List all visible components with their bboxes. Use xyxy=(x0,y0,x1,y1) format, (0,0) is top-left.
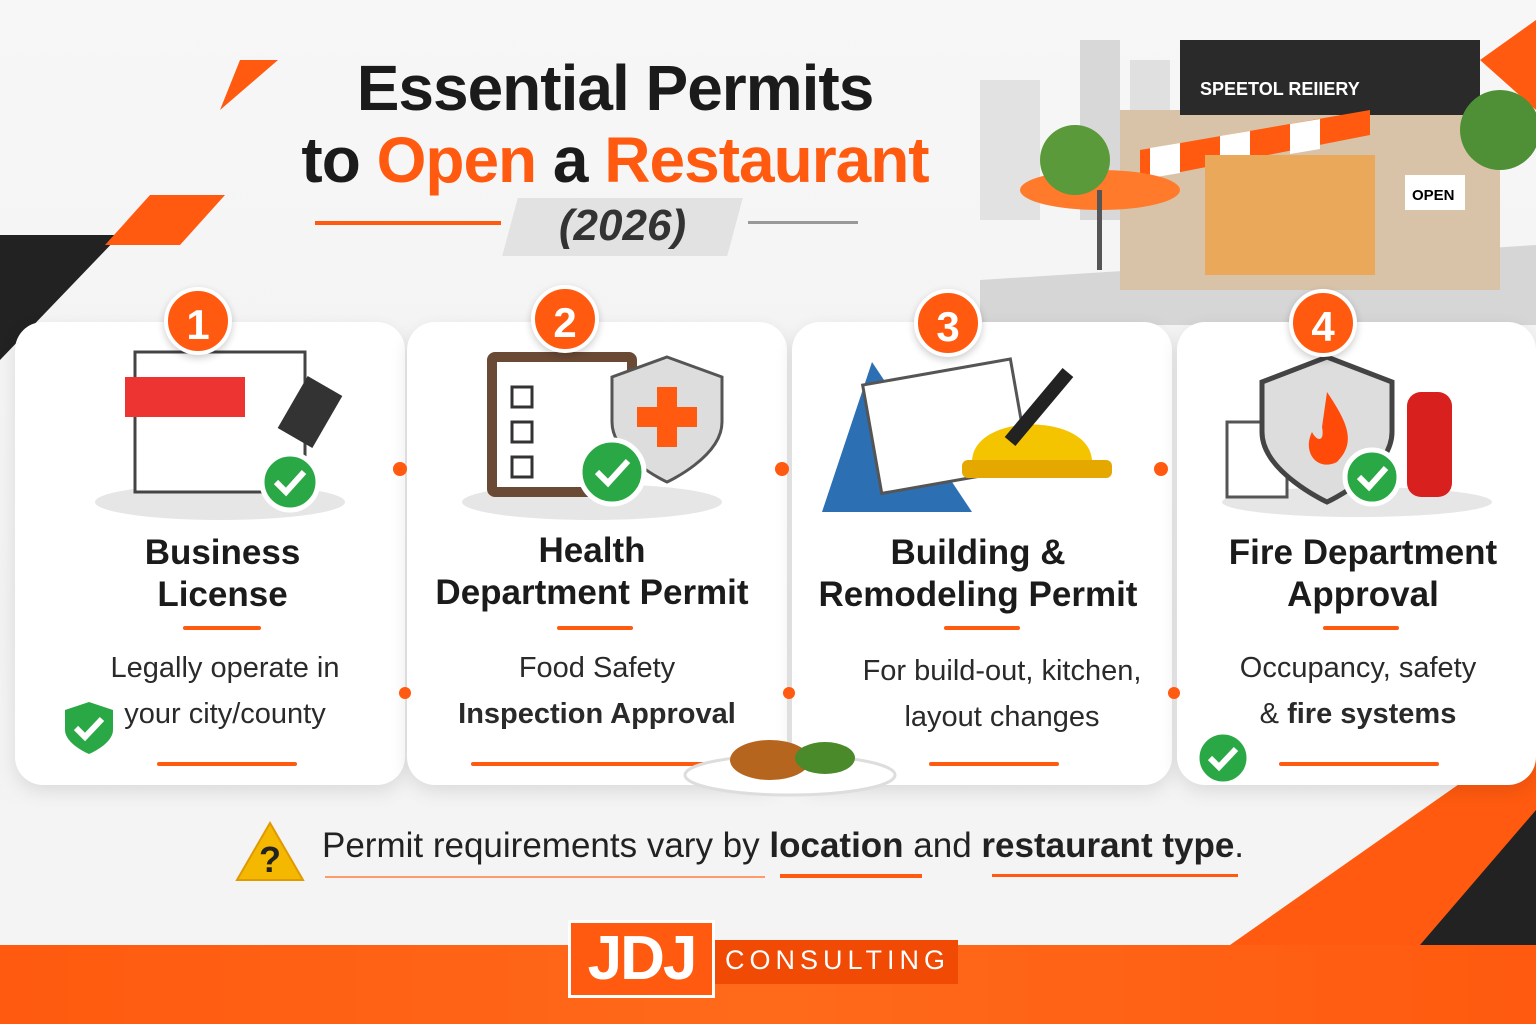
heading: Department Permit xyxy=(435,573,749,612)
icon: warning: ? xyxy=(259,839,281,880)
heading: Approval xyxy=(1287,575,1439,614)
heading xyxy=(1229,533,1497,614)
logo: JDJ consulting: CONSULTING xyxy=(725,945,950,975)
number 2: 2 xyxy=(553,299,577,346)
heading: Building & xyxy=(891,533,1065,572)
icon: check xyxy=(65,702,113,754)
callout: warning note xyxy=(235,821,1244,881)
text xyxy=(458,652,736,730)
title: Essential Permits xyxy=(357,52,873,124)
logo: JDJ consulting xyxy=(568,920,958,998)
heading xyxy=(435,531,749,612)
panel: fire department xyxy=(1177,322,1536,785)
panel: building xyxy=(792,322,1172,785)
text xyxy=(111,652,339,730)
icon: blueprints and hard hat xyxy=(822,357,1112,512)
icon: warning xyxy=(235,821,305,881)
callout: warning note: Permit requirements vary by location and restaurant type. xyxy=(322,826,1244,865)
heading: License xyxy=(157,575,288,614)
icon: storefront document xyxy=(95,350,345,520)
connectors xyxy=(393,462,1180,699)
heading xyxy=(819,533,1137,614)
text: & fire systems xyxy=(1260,698,1456,730)
number 2 xyxy=(531,285,599,353)
text: Food Safety xyxy=(519,652,675,684)
text: For build-out, kitchen, xyxy=(863,655,1141,687)
illustration: food plate xyxy=(684,740,896,796)
number 1 xyxy=(164,287,232,355)
text: Inspection Approval xyxy=(458,698,736,730)
number 3: 3 xyxy=(936,303,960,350)
icon: clipboard shield xyxy=(462,352,724,520)
text xyxy=(1240,652,1476,730)
title: to Open a Restaurant xyxy=(301,124,929,196)
heading: Fire Department xyxy=(1229,533,1497,572)
text: your city/county xyxy=(124,698,326,730)
year badge xyxy=(315,198,858,256)
panel: health department xyxy=(407,322,787,785)
number 1: 1 xyxy=(186,301,210,348)
footer band xyxy=(0,945,1536,1024)
text: Occupancy, safety xyxy=(1240,652,1476,684)
heading xyxy=(145,533,300,614)
illustration: restaurant storefront: OPEN xyxy=(1412,187,1455,204)
number 3 xyxy=(914,289,982,357)
heading: Remodeling Permit xyxy=(819,575,1137,614)
heading: Business xyxy=(145,533,300,572)
logo: JDJ consulting: JDJ xyxy=(588,924,695,993)
icon: check xyxy=(1200,734,1246,782)
text: Legally operate in xyxy=(111,652,339,684)
illustration: restaurant storefront: SPEETOL REIIERY xyxy=(1200,79,1360,99)
text xyxy=(863,655,1141,733)
icon: fire shield and extinguisher xyxy=(1222,356,1492,517)
number 4 xyxy=(1289,289,1357,357)
number 4: 4 xyxy=(1311,303,1335,350)
illustration: restaurant storefront xyxy=(980,40,1536,325)
title xyxy=(301,52,929,196)
heading: Health xyxy=(539,531,645,570)
year badge: (2026) xyxy=(559,201,686,250)
text: layout changes xyxy=(904,701,1100,733)
panel: business license xyxy=(15,322,405,785)
